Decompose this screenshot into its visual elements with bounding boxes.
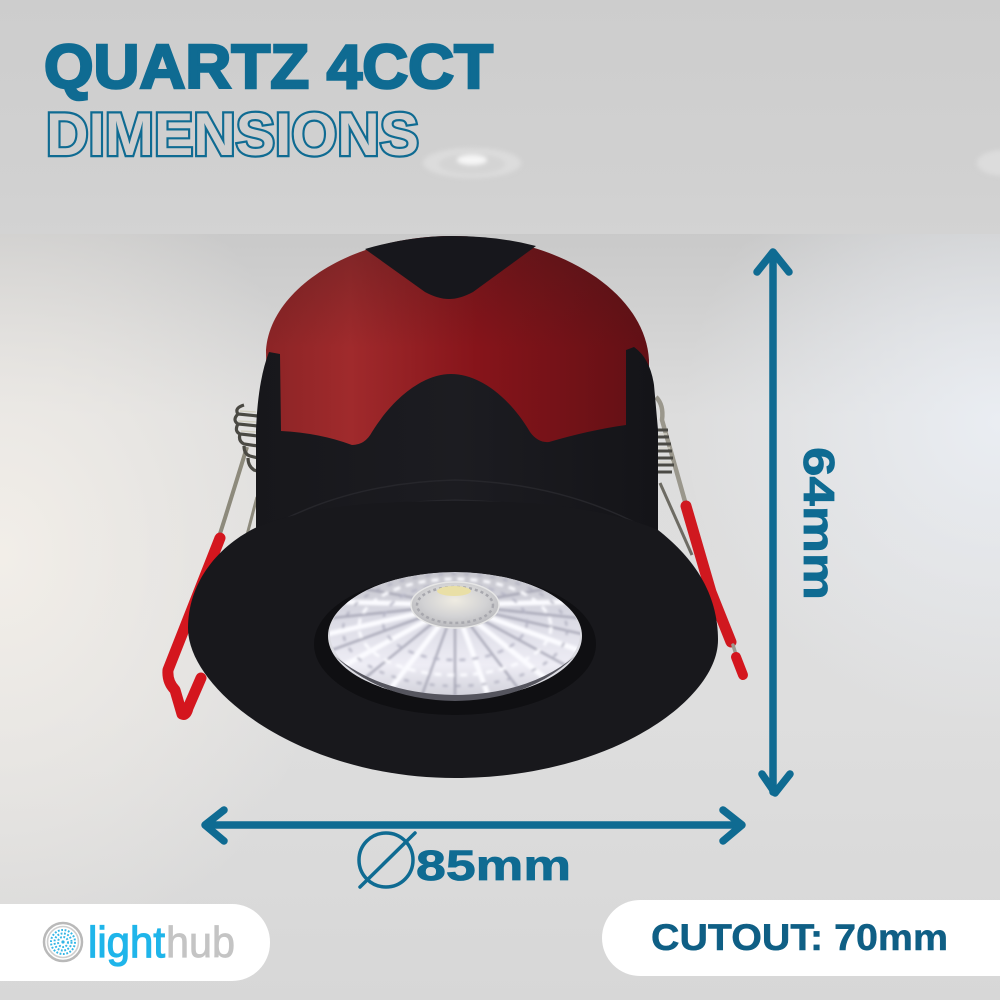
red top housing [266,236,649,460]
height label: 64mm [794,447,843,600]
downlight product illustration [168,236,743,778]
title: QUARTZ 4CCT [44,33,493,102]
left red clip [168,538,220,714]
right red clip [686,506,743,675]
lens rim [328,573,582,699]
black lower collar [256,347,658,540]
logo word light: light [88,918,165,967]
flange [188,501,718,778]
lens [328,572,582,697]
background: ceiling [0,0,1000,234]
lens hub [411,582,499,628]
LED chip [437,586,471,596]
collar steps [256,480,658,535]
background: cool light on right wall [420,232,1000,792]
left spring and wires [218,405,260,540]
black top cap [365,236,536,299]
background: warm light on left wall [0,232,620,1000]
cutout pill [602,900,1000,976]
lens recess [314,573,596,715]
lens lower shadow [335,656,575,701]
width dimension arrow [205,810,742,841]
logo word hub: hub [166,918,235,967]
subtitle outlined: DIMENSIONS [46,101,419,168]
right spring and wires [652,397,692,555]
ceiling downlight, far right [977,150,1000,176]
diameter symbol [359,833,415,887]
width label: 85mm [416,842,571,890]
lens reflector facets [328,574,582,697]
height dimension arrow [757,252,790,793]
background: wall [0,232,1000,1000]
red top shading [266,236,649,460]
logo icon [44,923,82,961]
cutout text: CUTOUT: 70mm [651,917,948,958]
ceiling downlight, background [423,148,521,178]
logo pill [0,904,270,981]
